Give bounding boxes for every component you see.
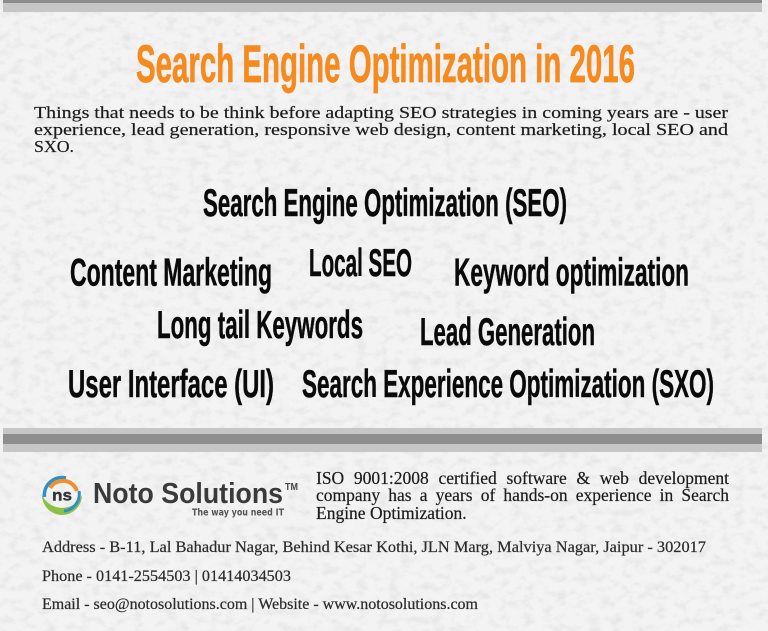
top band bbox=[3, 0, 762, 12]
email and website: Email - seo@notosolutions.com | Website - www.notosolutions.com bbox=[42, 596, 478, 613]
keyword: Long tail Keywords: Long tail Keywords bbox=[157, 304, 363, 347]
intro paragraph: Things that needs to be think before adapting SEO strategies in coming years are - user bbox=[34, 103, 728, 122]
keyword: Content Marketing: Content Marketing bbox=[70, 252, 272, 294]
company description: ISO 9001:2008 certified software & web development bbox=[316, 468, 729, 488]
icon: Noto Solutions logo: ns bbox=[52, 488, 72, 504]
intro paragraph: experience, lead generation, responsive web design, content marketing, local SEO and bbox=[34, 120, 729, 139]
intro paragraph: SXO. bbox=[34, 137, 74, 156]
keyword: Lead Generation: Lead Generation bbox=[420, 311, 595, 354]
phone: Phone - 0141-2554503 | 01414034503 bbox=[42, 568, 291, 585]
divider band bbox=[3, 428, 762, 452]
keyword: User Interface (UI): User Interface (UI) bbox=[68, 363, 274, 406]
intro paragraph bbox=[34, 103, 729, 156]
keyword: Local SEO: Local SEO bbox=[309, 242, 412, 285]
logo wordmark: Noto Solutions bbox=[93, 478, 283, 510]
company description: company has a years of hands-on experience in Search bbox=[316, 485, 729, 505]
address: Address - B-11, Lal Bahadur Nagar, Behind Kesar Kothi, JLN Marg, Malviya Nagar, Jaipur - 302017 bbox=[42, 539, 706, 556]
company description bbox=[316, 468, 729, 524]
company description: Engine Optimization. bbox=[316, 502, 467, 522]
icon: Noto Solutions logo bbox=[42, 478, 82, 515]
trademark: TM bbox=[285, 482, 298, 493]
logo tagline: The way you need IT bbox=[192, 508, 284, 518]
